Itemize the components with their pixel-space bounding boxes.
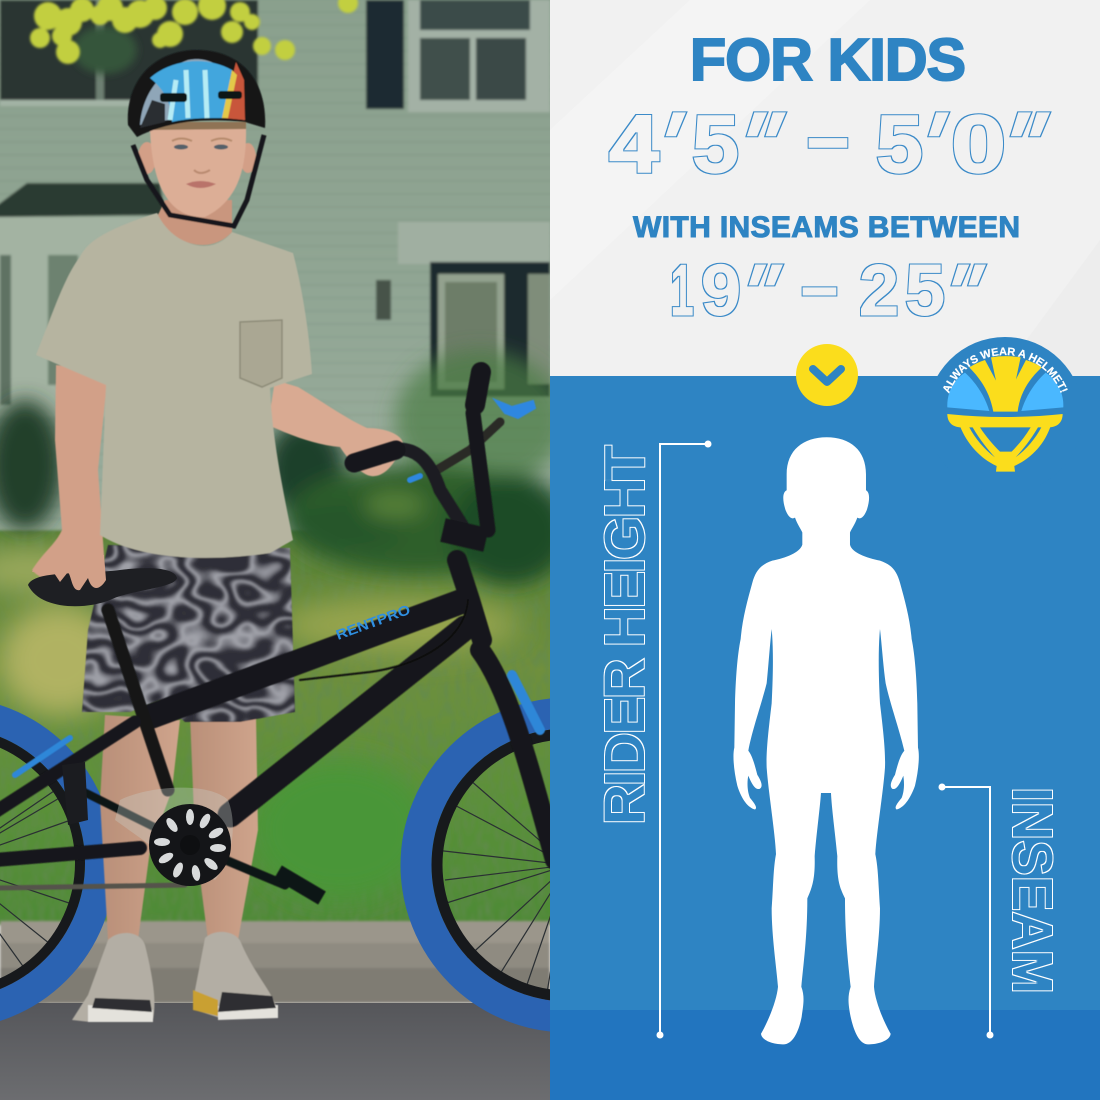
bicycle helmet [128, 50, 265, 137]
rear pedal [62, 762, 88, 825]
inseam label: INSEAM [1000, 787, 1064, 994]
left shoe [72, 933, 154, 1022]
helmet badge: always wear a helmet: ALWAYS WEAR A HELMET! [943, 347, 1068, 394]
shirt pocket [240, 320, 282, 387]
sprocket and chain guard [115, 788, 233, 886]
top panel: light background [550, 0, 1100, 376]
background foliage and bushes [0, 350, 570, 585]
inseam range: 19" - 25": " [724, 247, 794, 337]
seat tube [108, 610, 168, 790]
saddle [28, 568, 177, 606]
pedals [278, 872, 322, 898]
rider height range: 4'5" - 5'0": 0 [951, 99, 1006, 190]
cranks [86, 788, 156, 831]
front wheel [400, 698, 550, 1032]
hand on saddle [32, 550, 106, 590]
shorts [82, 545, 295, 722]
chevron badge [796, 344, 858, 406]
heading: FOR KIDS: FOR KIDS [690, 27, 966, 93]
badge arc backing [927, 337, 1083, 493]
t-shirt [36, 213, 312, 558]
bike decal: RENTPRO [334, 601, 412, 643]
boy [32, 50, 403, 1022]
rear caliper [15, 738, 70, 775]
inseam range: 19" - 25": 1 [670, 251, 694, 331]
down tube [230, 628, 465, 815]
rider height range: 4'5" - 5'0": 5 [692, 99, 739, 190]
facial features [148, 122, 246, 188]
right shoe [193, 932, 278, 1020]
rider height range: 4'5" - 5'0": 5 [876, 99, 923, 190]
inseam range: 19" - 25": 9 [701, 251, 741, 331]
inseam range: 19" - 25": 5 [905, 251, 945, 331]
curb [0, 921, 550, 1010]
chain [0, 885, 185, 888]
child silhouette [733, 437, 919, 1044]
rider height range: 4'5" - 5'0": " [983, 94, 1062, 194]
inseam measure line [938, 784, 994, 1038]
right arm and hand [268, 380, 403, 476]
rider height range: 4'5" - 5'0": – [807, 92, 849, 183]
inseam range: 19" - 25": 2 [859, 251, 899, 331]
inseam range: 19" - 25": " [927, 247, 997, 337]
inseam range: 19" - 25": – [801, 247, 838, 327]
brake cable [300, 600, 468, 680]
left arm and hand [32, 365, 108, 586]
stem and head tube [443, 530, 486, 540]
dark leaves under the tree canopy [73, 26, 137, 74]
legs [100, 715, 180, 940]
rider height range: 4'5" - 5'0" [609, 92, 1062, 194]
road [0, 1003, 550, 1100]
rear wheel [0, 712, 100, 1014]
tree leaves [30, 0, 358, 64]
ears [138, 142, 156, 174]
rider height range: 4'5" - 5'0": ' [639, 94, 697, 194]
helmet icon [947, 356, 1063, 472]
rider height range: 4'5" - 5'0": ' [902, 94, 960, 194]
rider height range: 4'5" - 5'0": " [719, 94, 798, 194]
helmet straps [133, 135, 264, 226]
rider height measure line [656, 440, 712, 1038]
helmet badge: always wear a helmet [938, 337, 1072, 472]
rider height range: 4'5" - 5'0": 4 [609, 99, 659, 190]
handlebars [432, 422, 500, 473]
inseam range: 19" - 25" [670, 247, 997, 337]
rider height label: RIDER HEIGHT [593, 445, 657, 825]
fork [480, 650, 555, 860]
photo background: house, lawn and street [0, 0, 570, 1100]
face [150, 125, 246, 217]
top tube [152, 602, 460, 716]
badge text on arc [945, 355, 1065, 415]
neck [158, 200, 232, 245]
BMX bike frame [0, 372, 555, 898]
floor band [550, 1010, 1100, 1100]
subheading: with inseams between: WITH INSEAMS BETWEEN [633, 211, 1020, 244]
sunlit grass patches [0, 548, 520, 900]
rear stays [0, 848, 140, 860]
lower panel: blue background [550, 376, 1100, 1100]
front caliper [512, 675, 540, 730]
photo: boy standing with BMX bike [0, 0, 550, 1100]
